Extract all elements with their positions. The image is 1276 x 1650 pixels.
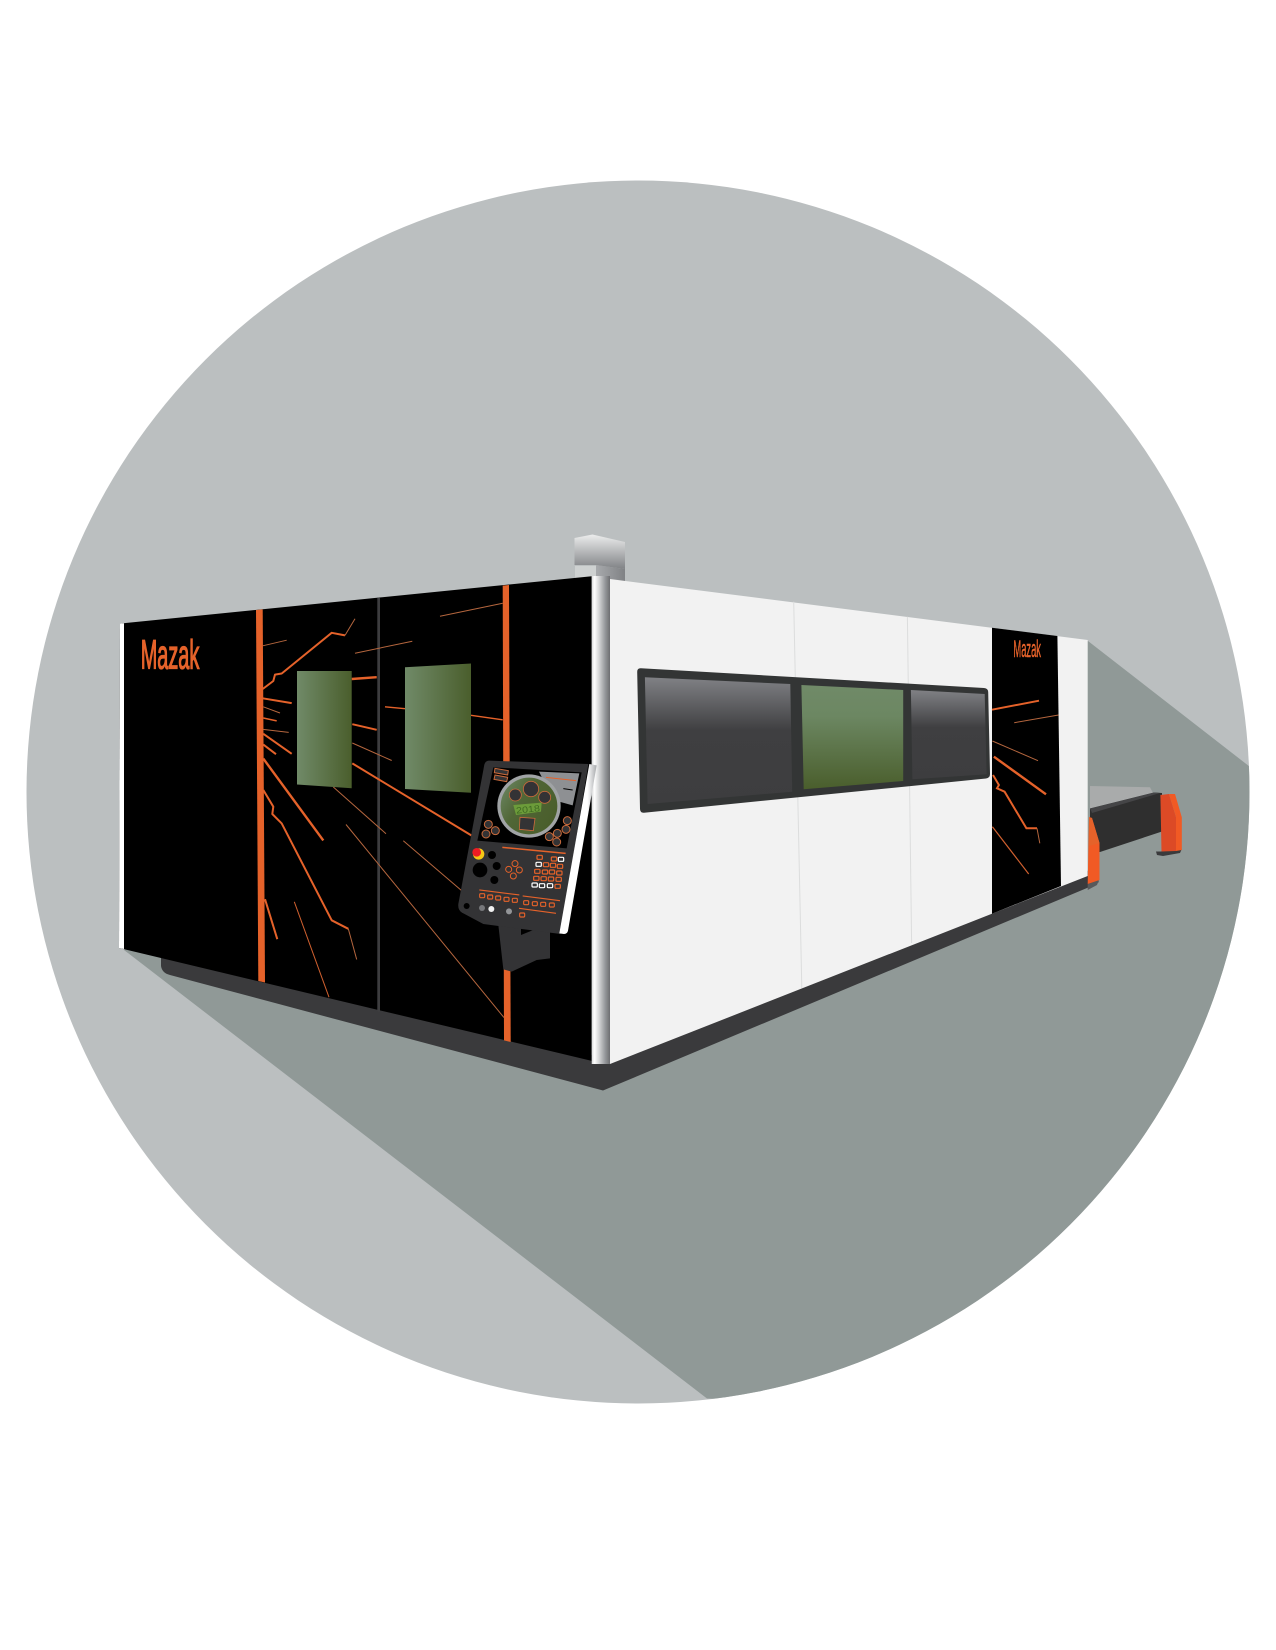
long cast shadow — [124, 641, 1276, 1420]
pendant body — [458, 761, 588, 934]
orange end post far — [1156, 794, 1182, 856]
laser sparks, thick — [263, 633, 503, 939]
right black panel section — [992, 628, 1061, 914]
left black enclosure panel — [119, 576, 592, 1061]
green viewing window one — [297, 671, 352, 788]
indicator dots — [479, 905, 512, 914]
grey door divider — [377, 597, 380, 1012]
screen dial: 2018 — [516, 803, 540, 816]
sparks on right panel — [992, 701, 1059, 874]
table sheet — [1090, 786, 1153, 808]
pendant arm — [498, 925, 550, 972]
orange ring buttons — [506, 861, 522, 879]
machine base plinth — [161, 870, 1099, 1090]
right white enclosure panel — [610, 579, 1088, 1064]
orange door stripe left — [256, 609, 265, 982]
corner column — [592, 576, 610, 1064]
long window frame — [637, 668, 990, 813]
loading table — [1088, 786, 1182, 890]
control panel pendant — [458, 761, 597, 972]
window pane left — [645, 677, 792, 804]
black buttons — [464, 851, 501, 909]
lower keys and rules — [479, 847, 566, 917]
pendant screen — [477, 767, 582, 848]
pendant white bezel — [559, 764, 597, 934]
table rail — [1090, 792, 1162, 852]
green viewing window two — [405, 664, 471, 793]
key grid — [532, 855, 564, 888]
left black enclosure panel: Mazak — [141, 632, 200, 678]
chimney vent — [574, 534, 625, 582]
right black panel section: Mazak — [1013, 636, 1041, 663]
orange end post near — [1088, 817, 1100, 890]
orange door stripe right — [503, 585, 511, 1042]
laser sparks, thin — [263, 603, 504, 1018]
window pane right — [911, 690, 987, 779]
background circle — [26, 180, 1250, 1404]
window pane green — [801, 685, 903, 789]
emergency stop button — [472, 848, 484, 860]
